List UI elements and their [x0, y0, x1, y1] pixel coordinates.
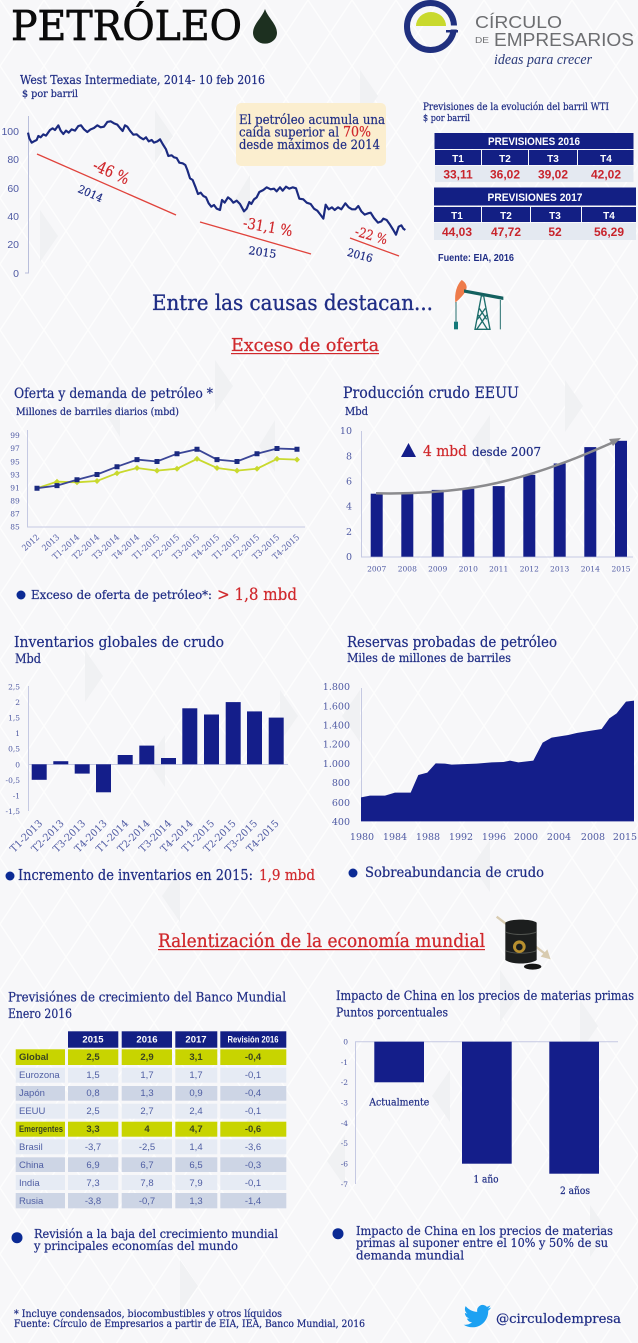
table: growth by region: EEUU [19, 1106, 46, 1117]
axes and labels: 2009 [428, 564, 447, 574]
axes and labels: T1-2014 [51, 533, 82, 562]
axes and labels: 89 [10, 496, 20, 506]
axes and labels: T2-2015 [202, 818, 239, 855]
panel: US crude production [340, 384, 633, 574]
axes and labels: 1.400 [323, 720, 350, 732]
table: growth by region: -0,1 [245, 1178, 261, 1189]
table: forecasts 2016: PREVISIONES 2016 [488, 136, 580, 148]
table: growth by region: -0,3 [245, 1160, 261, 1171]
axes and labels: T4-2015 [271, 533, 302, 562]
takeaway: crude glut: Sobreabundancia de crudo [365, 865, 544, 881]
axes and labels: 97 [10, 444, 20, 453]
axes and labels [323, 682, 637, 843]
table: growth by region: 2,9 [140, 1052, 154, 1063]
table: forecasts 2016: 33,11 [443, 168, 473, 182]
axes and labels: T3-2014 [91, 533, 122, 562]
axes and labels: 1.000 [323, 759, 350, 770]
table: growth by region: 3,3 [86, 1124, 100, 1135]
table: forecasts 2016: T4 [600, 154, 612, 165]
table: forecasts 2016: T2 [499, 154, 511, 165]
y axis [1, 116, 29, 280]
table: growth by region: 1,3 [189, 1196, 203, 1207]
table: growth by region: 3,1 [189, 1052, 203, 1063]
axes and labels: T4-2015 [191, 533, 222, 562]
takeaway: inventory increase: 1,9 mbd [259, 868, 315, 884]
table: growth by region: 0,9 [189, 1088, 203, 1099]
axes and labels: 1992 [449, 832, 473, 843]
table: growth by region: -2,5 [139, 1142, 155, 1153]
table: growth by region: China [19, 1160, 45, 1171]
table: growth by region: 4 [144, 1124, 150, 1135]
axes and labels: 2008 [581, 832, 605, 843]
axes and labels: 1988 [416, 832, 440, 843]
takeaway: downward revision: y principales economías del mundo [33, 1238, 238, 1253]
table: forecasts 2017: T2 [500, 211, 512, 222]
table: growth by region: 2,4 [189, 1106, 203, 1117]
table: forecasts 2016: 36,02 [490, 168, 520, 182]
axes and labels: 1,5 [8, 714, 20, 722]
trend 2014: red line and labels: 2014 [76, 183, 105, 205]
bar labels: 1 año [474, 1175, 498, 1186]
bar labels [368, 1098, 590, 1197]
table: growth by region: Rusia [19, 1196, 44, 1207]
table: growth by region: India [19, 1178, 40, 1189]
axes and labels [10, 430, 305, 562]
trend 2015: red line and labels [200, 214, 311, 261]
twitter handle: @circulodempresa [496, 1312, 621, 1327]
axes and labels: 2012 [20, 533, 42, 554]
panel: WTI forecasts [423, 102, 636, 264]
table: growth by region: -3,7 [85, 1142, 101, 1153]
takeaway: downward revision [12, 1226, 278, 1253]
logo: Círculo de Empresarios: ideas para crecer [494, 52, 592, 68]
table: growth by region: -0,6 [245, 1124, 261, 1135]
table: growth by region: 2,7 [140, 1106, 154, 1117]
table: growth by region: 7,3 [86, 1178, 100, 1189]
table: forecasts 2016 [434, 133, 634, 182]
table: forecasts 2017: 44,03 [442, 225, 472, 239]
section heading: oversupply: Exceso de oferta [231, 335, 379, 356]
icon: pumpjack [454, 280, 503, 329]
axes and labels: 1980 [350, 832, 374, 843]
panel: China impact on commodity prices [332, 989, 634, 1262]
axes and labels: 0,5 [8, 744, 20, 754]
axes and labels: -6 [341, 1160, 348, 1168]
axes and labels: 10 [340, 426, 352, 437]
subheading: Mbd: Mbd [15, 652, 41, 667]
axes and labels: 0 [15, 760, 20, 770]
subheading: percentage points: Puntos porcentuales [336, 1004, 448, 1020]
axes and labels: 2007 [367, 564, 386, 574]
axes and labels: T1-2014 [94, 818, 131, 855]
source note: Fuente: EIA, 2016 [438, 252, 514, 264]
axes and labels: 2011 [489, 564, 508, 574]
callout: 70% fall: El petróleo acumula una [239, 113, 385, 128]
axes and labels: 2015 [613, 832, 637, 843]
table: forecasts 2017: 52 [548, 225, 562, 239]
area chart [361, 701, 634, 821]
axes and labels: 1984 [383, 832, 407, 843]
axes and labels: -0,5 [6, 776, 20, 785]
heading: supply and demand: Oferta y demanda de petróleo * [14, 386, 213, 402]
axes and labels: 85 [10, 522, 20, 532]
bar labels: Actualmente [368, 1098, 429, 1109]
axes and labels: 2013 [550, 564, 569, 574]
axes and labels: -2 [341, 1078, 348, 1087]
axes and labels: 91 [10, 484, 20, 492]
price line [28, 121, 405, 235]
logo: Círculo de Empresarios: CÍRCULO [475, 12, 562, 32]
table: growth by region: Japón [19, 1088, 45, 1099]
axes and labels: 1.200 [323, 740, 350, 750]
panel: supply and demand [10, 386, 305, 605]
axes and labels: 0 [343, 1038, 348, 1046]
callout: 70% fall [236, 103, 386, 166]
axes and labels: T1-2015 [131, 533, 162, 562]
takeaway: excess supply: Exceso de oferta de petróleo*: [31, 587, 212, 602]
axes and labels [6, 682, 288, 855]
axes and labels: -1 [341, 1058, 348, 1067]
table: growth by region: -0,4 [245, 1088, 261, 1099]
heading: proven reserves: Reservas probadas de petróleo [347, 633, 557, 651]
takeaway: inventory increase: Incremento de inventarios en 2015: [18, 868, 253, 884]
arrow: growth trend [376, 438, 621, 493]
axes and labels [341, 1038, 618, 1189]
axes and labels: -5 [341, 1139, 348, 1148]
takeaway: China demand share [332, 1223, 613, 1262]
footnote and sources: * Incluye condensados, biocombustibles y otros líquidos [14, 1308, 282, 1320]
axes and labels: -1 [13, 792, 20, 800]
title: PETRÓLEO [11, 1, 242, 50]
table: forecasts 2016: T3 [547, 154, 559, 165]
axes and labels: 99 [10, 431, 20, 440]
axes and labels: 1996 [482, 832, 506, 843]
panel: World Bank growth forecasts [8, 990, 286, 1253]
table: forecasts 2016: 42,02 [591, 168, 621, 182]
trend 2016: red line and labels: 2016 [346, 246, 374, 265]
heading: inventories: Inventarios globales de crudo [14, 633, 224, 651]
table: forecasts 2017 [434, 188, 636, 240]
callout: 70% fall: caída superior al [239, 126, 339, 140]
table: growth by region: 7,8 [140, 1178, 154, 1189]
icon: twitter bird [464, 1305, 491, 1327]
heading: forecasts: Previsiones de la evolución del barril WTI [423, 102, 609, 113]
bar labels: 2 años [560, 1186, 590, 1197]
table: growth by region: -1,4 [245, 1196, 261, 1207]
table: growth by region: 2016 [136, 1035, 158, 1046]
heading: World Bank forecasts: Previsiónes de crecimiento del Banco Mundial [8, 990, 286, 1006]
y axis: 80 [7, 154, 19, 166]
table: growth by region: 1,4 [189, 1142, 203, 1153]
axes and labels: 400 [332, 817, 350, 828]
axes and labels: 1 [15, 729, 20, 738]
callout: 4 mbd since 2007 [401, 442, 541, 460]
takeaway: China demand share: primas al suponer entre el 10% y 50% de su [356, 1235, 608, 1250]
axes and labels: 4 [346, 502, 352, 512]
axes and labels: T2-2015 [231, 533, 262, 562]
axes and labels: T1-2013 [8, 818, 45, 855]
axes and labels: 2 [15, 698, 20, 707]
axes and labels: T3-2013 [51, 818, 88, 855]
table: growth by region: Eurozona [19, 1070, 60, 1081]
axes and labels: -7 [341, 1180, 348, 1189]
table: growth by region: -0,1 [245, 1106, 261, 1117]
callout: 70% fall: 70% [343, 124, 371, 140]
axes and labels: 1.600 [323, 702, 350, 712]
axes and labels: T2-2014 [71, 533, 102, 562]
subheading: dollars per barrel: $ por barril [22, 88, 79, 100]
table: growth by region: 1,3 [140, 1088, 154, 1099]
subheading: dollars per barrel: $ por barril [423, 114, 470, 124]
bars [374, 1042, 599, 1174]
axes and labels: 95 [10, 458, 20, 466]
axes and labels: 2008 [398, 564, 417, 574]
heading: causes: Entre las causas destacan... [152, 291, 433, 315]
table: forecasts 2017: 56,29 [594, 225, 624, 239]
axes and labels: T4-2013 [73, 818, 110, 855]
axes and labels: 2013 [40, 533, 62, 554]
logo: Círculo de Empresarios: DE [475, 36, 489, 45]
axes and labels: 6 [346, 476, 352, 488]
trend 2014: red line and labels: -46 % [90, 156, 132, 188]
table: growth by region: 1,7 [140, 1070, 154, 1081]
icon: oil drop [253, 9, 277, 44]
trend 2015: red line and labels: -31,1 % [242, 214, 294, 240]
table: growth by region: 2,5 [86, 1052, 100, 1063]
heading: West Texas Intermediate: West Texas Intermediate, 2014- 10 feb 2016 [20, 72, 265, 87]
table: growth by region: 6,9 [86, 1160, 100, 1171]
table: growth by region: -3,8 [85, 1196, 101, 1207]
footnote and sources: Fuente: Círculo de Empresarios a partir de EIA, IEA, Banco Mundial, 2016 [14, 1318, 365, 1330]
axes and labels: 2,5 [8, 682, 20, 692]
logo: Círculo de Empresarios: EMPRESARIOS [494, 30, 634, 50]
trend 2015: red line and labels: 2015 [248, 244, 277, 261]
y axis: 0 [13, 268, 19, 280]
panel: proven oil reserves [323, 633, 637, 881]
takeaway: excess supply [16, 585, 297, 605]
takeaway: China demand share: Impacto de China en los precios de materias [356, 1223, 613, 1238]
axes and labels: T3-2014 [137, 818, 174, 855]
table: forecasts 2017: T4 [603, 211, 615, 222]
axes and labels: 2000 [514, 832, 538, 843]
axes and labels: T3-2015 [223, 818, 260, 855]
axes and labels: 800 [332, 778, 350, 789]
subheading: Mbd: Mbd [345, 405, 368, 418]
axes and labels: -1,5 [6, 807, 20, 816]
logo: Círculo de Empresarios [407, 3, 634, 68]
series: supply (blue line) [34, 446, 300, 491]
table: growth by region: Brasil [19, 1142, 43, 1153]
axes and labels: 2 [346, 527, 352, 538]
axes and labels: 93 [10, 470, 20, 480]
axes and labels: T3-2015 [171, 533, 202, 562]
axes and labels: -4 [341, 1119, 348, 1128]
axes and labels: T2-2014 [116, 818, 153, 855]
series: demand (yellow line) [37, 456, 300, 488]
axes and labels: T4-2015 [245, 818, 282, 855]
bars [371, 441, 627, 557]
takeaway: excess supply: > 1,8 mbd [217, 585, 297, 605]
axes and labels: 2010 [459, 564, 478, 574]
axes and labels: T2-2013 [30, 818, 67, 855]
heading: US crude production: Producción crudo EEUU [343, 384, 519, 402]
table: growth by region [16, 1031, 286, 1208]
table: forecasts 2017: PREVISIONES 2017 [488, 192, 582, 204]
callout: 4 mbd since 2007: 4 mbd [423, 442, 467, 460]
takeaway: downward revision: Revisión a la baja del crecimiento mundial [34, 1226, 278, 1241]
table: growth by region: 2015 [82, 1035, 104, 1046]
bars [32, 702, 284, 792]
callout: 70% fall: desde máximos de 2014 [239, 138, 380, 153]
axes and labels: 2004 [547, 832, 571, 843]
table: forecasts 2017: T3 [549, 211, 561, 222]
table: growth by region: 4,7 [189, 1124, 203, 1135]
panel: WTI price chart [1, 72, 405, 280]
table: growth by region: 1,5 [86, 1070, 100, 1081]
trend 2014: red line and labels [37, 154, 176, 215]
table: growth by region: Global [19, 1052, 49, 1063]
takeaway: China demand share: demanda mundial [356, 1248, 464, 1262]
table: growth by region: 2,5 [86, 1106, 100, 1117]
axes and labels: T1-2015 [180, 818, 217, 855]
table: growth by region: 2017 [185, 1035, 207, 1046]
axes and labels: T4-2014 [111, 533, 142, 562]
y axis: 20 [7, 239, 19, 251]
axes and labels: 2012 [520, 564, 539, 574]
y axis: 100 [1, 126, 19, 138]
callout: 4 mbd since 2007: desde 2007 [472, 444, 541, 459]
table: growth by region: Emergentes [19, 1124, 63, 1135]
axes and labels: T3-2015 [251, 533, 282, 562]
table: growth by region: -0,4 [245, 1052, 262, 1063]
axes and labels [340, 426, 633, 574]
table: forecasts 2016: 39,02 [538, 168, 568, 182]
section heading: economic slowdown: Ralentización de la economía mundial [158, 931, 485, 952]
subheading: billions of barrels: Miles de millones de barriles [347, 651, 511, 665]
axes and labels: 2014 [581, 564, 600, 574]
axes and labels: T1-2015 [211, 533, 242, 562]
table: growth by region: 6,5 [189, 1160, 203, 1171]
trend 2016: red line and labels [346, 224, 399, 265]
axes and labels: 0 [346, 552, 352, 563]
axes and labels: T2-2015 [151, 533, 182, 562]
table: growth by region: 7,9 [189, 1178, 203, 1189]
footnote and sources [14, 1308, 365, 1330]
axes and labels: 1.800 [323, 682, 350, 693]
axes and labels: 87 [10, 510, 20, 518]
y axis: 60 [7, 183, 19, 195]
axes and labels: 8 [346, 452, 352, 462]
table: growth by region: 0,8 [86, 1088, 100, 1099]
table: growth by region: 6,7 [140, 1160, 154, 1171]
table: growth by region: -0,7 [139, 1196, 155, 1207]
panel: global crude inventories [6, 633, 315, 884]
icon: oil barrel with falling arrow [497, 917, 551, 970]
table: growth by region: 1,7 [189, 1070, 203, 1081]
table: growth by region: -3,6 [245, 1142, 261, 1153]
table: growth by region: Revisión 2016 [228, 1035, 278, 1046]
trend 2016: red line and labels: -22 % [353, 224, 389, 248]
axes and labels: -3 [341, 1098, 348, 1108]
table: forecasts 2017: T1 [451, 211, 463, 222]
axes and labels: T4-2014 [159, 818, 196, 855]
subheading: million barrels per day: Millones de barriles diarios (mbd) [16, 407, 179, 418]
axes and labels: 2015 [611, 564, 631, 574]
y axis: 40 [7, 211, 19, 223]
table: forecasts 2016: T1 [452, 154, 464, 165]
table: growth by region: -0,1 [245, 1070, 261, 1081]
table: forecasts 2017: 47,72 [491, 225, 521, 239]
subheading: January 2016: Enero 2016 [8, 1007, 72, 1022]
axes and labels: 600 [332, 798, 350, 809]
